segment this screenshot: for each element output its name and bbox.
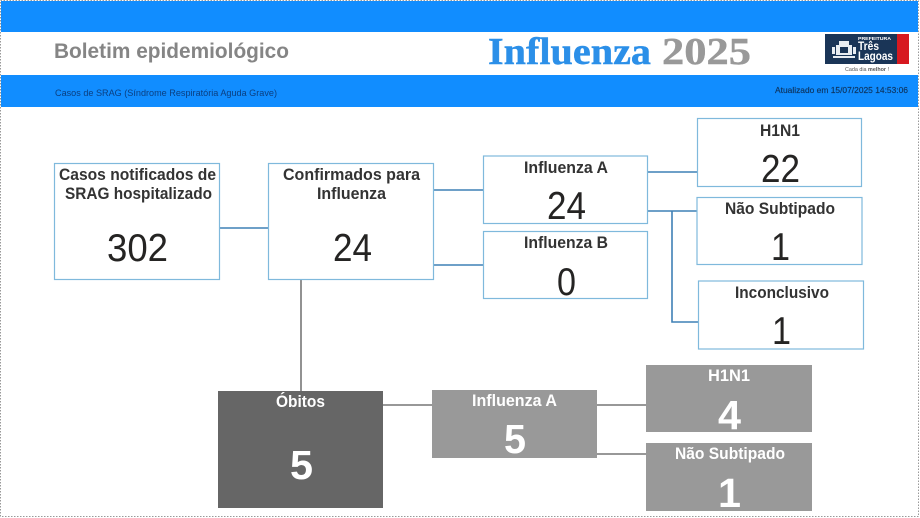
connector lines: cases flow [219, 172, 699, 322]
heading: Boletim epidemiológico: Boletim epidemiológico [54, 40, 289, 63]
panel: inconclusivo: Inconclusivo [735, 284, 829, 302]
panel: confirmados: Confirmados para [283, 166, 421, 184]
connector lines: deaths flow [301, 280, 646, 454]
panel: influenza A: 24 [547, 185, 586, 228]
panel: óbitos: 5 [290, 442, 313, 488]
panel: inconclusivo [698, 281, 864, 353]
panel: óbitos não subtipado: Não Subtipado [675, 444, 785, 463]
panel: influenza B: 0 [557, 261, 576, 304]
title: Influenza 2025: Influenza [488, 31, 651, 73]
panel: casos notificados: 302 [107, 227, 168, 270]
panel: influenza B: Influenza B [524, 234, 608, 252]
panel: óbitos H1N1 [646, 365, 812, 438]
logo: Prefeitura Três Lagoas: PREFEITURA [858, 36, 892, 41]
panel: influenza A [484, 156, 648, 228]
panel: influenza B [484, 232, 648, 304]
panel: influenza A: Influenza A [524, 159, 608, 177]
subtitle text: Casos de SRAG (Síndrome Respiratória Aguda Grave) [55, 88, 277, 99]
logo: Prefeitura Três Lagoas [825, 34, 909, 73]
icon: city crest [832, 41, 856, 58]
update timestamp: Atualizado em 15/07/2025 14:53:06 [775, 85, 908, 95]
panel: H1N1: H1N1 [760, 122, 800, 140]
panel: confirmados [268, 164, 434, 280]
panel: não subtipado [697, 198, 862, 269]
title: Influenza 2025 [488, 31, 751, 73]
panel: óbitos [218, 391, 383, 508]
panel: confirmados: 24 [333, 227, 372, 270]
panel: casos notificados: Casos notificados de [59, 166, 216, 184]
panel: óbitos H1N1: H1N1 [708, 366, 750, 385]
panel: óbitos influenza A: 5 [504, 416, 526, 462]
subtitle banner [1, 75, 918, 107]
top blue banner [1, 1, 918, 32]
panel: óbitos não subtipado: 1 [718, 470, 741, 516]
panel: óbitos influenza A: Influenza A [472, 391, 557, 410]
panel: casos notificados [54, 164, 220, 280]
panel: H1N1: 22 [761, 148, 800, 191]
panel: óbitos: Óbitos [276, 392, 325, 411]
panel: inconclusivo: 1 [772, 310, 791, 353]
logo: Prefeitura Três Lagoas: Cada dia melhor ! [845, 67, 889, 73]
panel: óbitos H1N1: 4 [718, 392, 741, 438]
panel: não subtipado: Não Subtipado [725, 200, 835, 218]
logo: Prefeitura Três Lagoas: Lagoas [858, 51, 893, 63]
panel: confirmados: Influenza [317, 185, 387, 203]
title: Influenza 2025: 2025 [662, 31, 751, 73]
panel: óbitos não subtipado [646, 443, 812, 516]
panel: óbitos influenza A [432, 390, 597, 462]
logo: Prefeitura Três Lagoas: Três [858, 41, 879, 53]
panel: casos notificados: SRAG hospitalizado [65, 185, 212, 203]
panel: não subtipado: 1 [771, 226, 790, 269]
panel: H1N1 [698, 118, 862, 191]
